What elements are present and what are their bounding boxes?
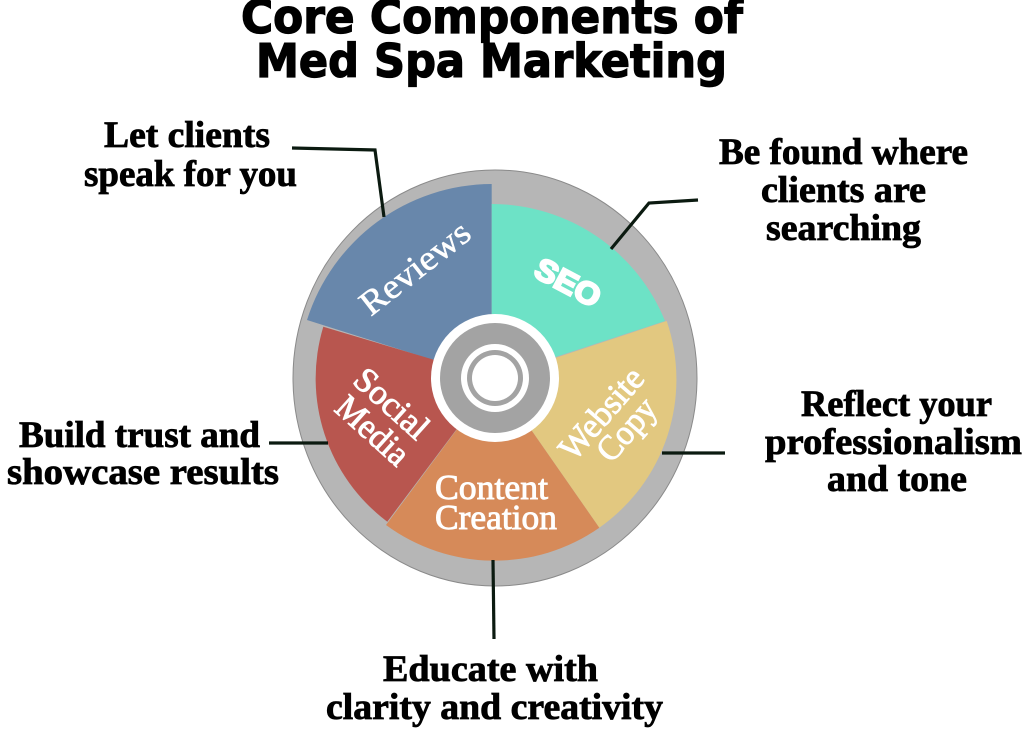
segment label: Reviews: Reviews [352,213,478,323]
callout: Content Creation: Educate with [383,649,598,690]
leader line: Website Copy [662,451,725,455]
callout: SEO: searching [766,208,922,249]
leader line: Social Media [269,441,328,445]
segment label: Content Creation: Content [435,468,548,507]
callout: Website Copy: professionalism [765,422,1022,463]
callout: Content Creation: clarity and creativity [326,687,664,728]
segment: SEO [492,204,665,378]
segment label: Content Creation: Creation [435,498,557,537]
callout: Website Copy [765,384,1022,500]
callout: Social Media: showcase results [7,452,279,493]
callout: SEO: clients are [761,170,926,211]
leader line: Content Creation [493,560,494,639]
segment label: Social Media: Media [328,387,418,474]
callout: Content Creation [326,649,664,728]
segment label: Website Copy: Website [551,359,652,468]
segment label: Social Media [328,360,438,474]
callout: Reviews [84,115,297,195]
callout: Reviews: speak for you [84,154,297,195]
title: Med Spa Marketing [256,34,727,88]
wheel diagram [293,170,697,586]
segment label: SEO: SEO [529,251,607,315]
callout: SEO [719,132,968,249]
outer grey ring [293,170,697,586]
center hub [431,314,559,442]
callout: SEO: Be found where [719,132,968,173]
callout: Social Media [7,415,279,493]
segment: Website Copy [495,321,676,528]
segment label: Content Creation [435,468,557,537]
callout: Website Copy: and tone [827,459,967,500]
title [241,0,744,88]
callout: Social Media: Build trust and [19,415,260,456]
callout: Website Copy: Reflect your [801,384,992,425]
segment label: Website Copy: Copy [588,389,665,469]
segment label: Social Media: Social [346,360,438,448]
leader line: SEO [611,200,698,249]
callout: Reviews: Let clients [104,115,270,156]
segment: Social Media [316,327,495,522]
segment: Reviews [307,184,492,379]
leader line: Reviews [292,148,384,217]
segment: Content Creation [386,378,599,561]
